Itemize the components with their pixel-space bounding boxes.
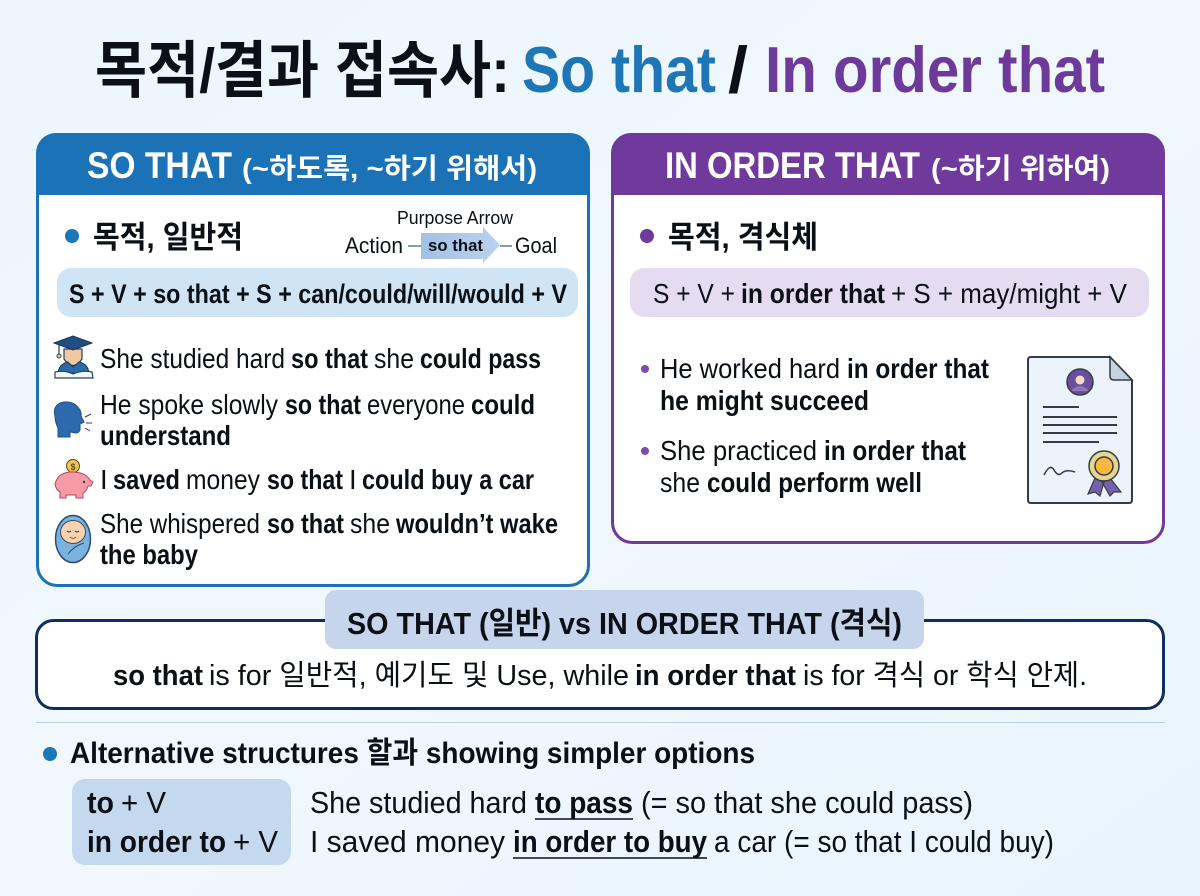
purpose arrow diagram (345, 207, 557, 263)
so that examples: She studied hard (100, 343, 285, 374)
title: So that (522, 33, 716, 106)
so that examples: she (374, 343, 414, 374)
so that examples: she (350, 508, 390, 539)
in order that formula (630, 268, 1149, 317)
so that examples: He spoke slowly (100, 389, 278, 420)
so that header: (~하도록, ~하기 위해서) (242, 153, 537, 184)
so that examples (100, 343, 558, 570)
so that examples: I (100, 464, 108, 495)
so that examples: wouldn’t wake (395, 508, 558, 539)
in order that header (611, 133, 1165, 195)
so that header: SO THAT (87, 145, 232, 186)
so that examples: She whispered (100, 508, 260, 539)
comparison text: is for 격식 or 학식 안제. (803, 659, 1087, 692)
in order that formula: in order that (741, 278, 885, 309)
in order that examples (641, 353, 989, 498)
panel: so that (36, 133, 590, 586)
purpose arrow diagram: so that (428, 236, 483, 255)
comparison heading (325, 590, 924, 649)
icon: speaking head (54, 402, 92, 437)
in order that formula: S + V + (653, 278, 735, 309)
alternatives formula box: in order to (87, 825, 226, 859)
alternatives examples: a car (= so that I could buy) (714, 825, 1054, 859)
alternatives examples: (= so that she could pass) (641, 786, 973, 820)
title: / (728, 33, 748, 106)
title: 목적/결과 접속사: (95, 37, 510, 106)
comparison heading: SO THAT (일반) vs IN ORDER THAT (격식) (347, 606, 902, 641)
in order that examples: in order that (847, 353, 989, 384)
so that examples: could (471, 389, 535, 420)
comparison text (113, 659, 1087, 692)
so that examples: so that (285, 389, 361, 420)
alternatives examples: in order to buy (513, 825, 707, 859)
in order that examples: in order that (824, 435, 966, 466)
icon: certificate document (1028, 357, 1132, 503)
icon: piggy bank: $ (70, 462, 76, 472)
comparison text: in order that (635, 660, 796, 692)
icon: baby (56, 516, 90, 562)
in order that formula: + S + may/might + V (891, 278, 1128, 309)
so that examples: everyone (367, 389, 465, 420)
in order that examples: could perform well (707, 467, 922, 498)
so that examples: so that (267, 464, 343, 495)
icon: graduate (54, 336, 93, 378)
so that examples: understand (100, 420, 231, 451)
alternatives examples: I saved money (310, 825, 506, 859)
so that examples: the baby (100, 539, 199, 570)
so that examples: so that (291, 343, 368, 374)
title: In order that (765, 33, 1105, 106)
alternatives examples (310, 786, 1054, 859)
in order that examples: She practiced (660, 435, 817, 466)
so that examples: could pass (420, 343, 541, 374)
purpose arrow diagram: Purpose Arrow (397, 207, 514, 228)
so that examples: money (186, 464, 260, 495)
so that examples: so that (267, 508, 344, 539)
panel: in order that (611, 133, 1165, 542)
in order that header: (~하기 위하여) (931, 153, 1110, 184)
comparison text: so that (113, 660, 203, 692)
so that examples: I (349, 464, 357, 495)
alternatives examples: She studied hard (310, 786, 527, 820)
purpose arrow diagram: Goal (515, 233, 557, 258)
alternatives formula box (72, 779, 291, 865)
in order that subheading: 목적, 격식체 (668, 220, 818, 255)
alternatives heading: Alternative structures 할과 showing simpler options (70, 737, 755, 770)
so that subheading: 목적, 일반적 (93, 220, 243, 255)
purpose arrow diagram: Action (345, 233, 403, 258)
in order that header: IN ORDER THAT (665, 145, 920, 186)
in order that examples: he might succeed (660, 385, 869, 416)
comparison box (36, 590, 1164, 708)
alternatives formula box: + V (121, 786, 167, 820)
alternatives formula box: to (87, 786, 114, 820)
so that examples: could buy a car (362, 464, 534, 495)
in order that examples: He worked hard (660, 353, 840, 384)
so that examples: saved (113, 464, 180, 495)
comparison text: is for 일반적, 예기도 및 Use, while (209, 660, 629, 692)
so that formula (57, 268, 578, 317)
alternatives examples: to pass (535, 786, 633, 820)
so that formula: S + V + so that + S + can/could/will/would + V (69, 279, 567, 309)
icon: piggy bank (55, 460, 93, 498)
so that header (36, 133, 590, 195)
in order that examples: she (660, 467, 700, 498)
alternatives formula box: + V (233, 825, 279, 859)
title (95, 33, 1105, 106)
